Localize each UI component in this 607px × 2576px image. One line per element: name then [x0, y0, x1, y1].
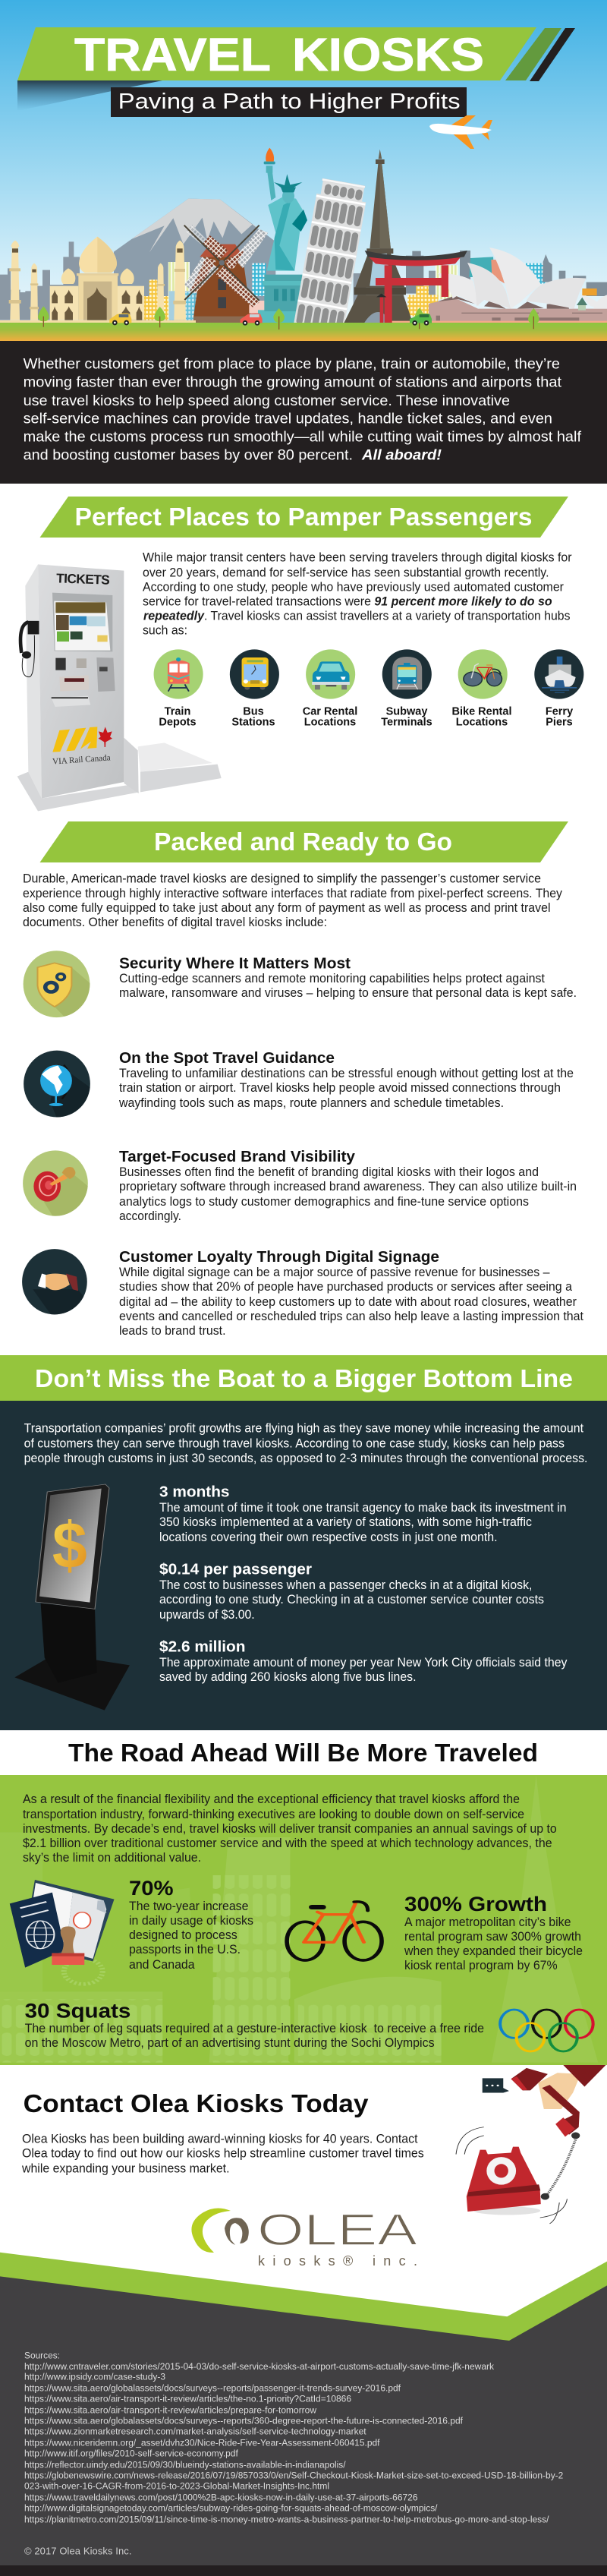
text block: sources: Sources: [24, 2351, 60, 2361]
icon labels: Bus [243, 706, 264, 718]
text block: sources: https://reflector.uindy.edu/2015/09/30/blueindy-stations-available-in-indianapolis/ [24, 2460, 346, 2470]
trees and cars [38, 305, 607, 329]
stat: $2.6 million: saved by adding 260 kiosks along five bus lines. [159, 1670, 416, 1684]
footer background [0, 2253, 607, 2576]
text block: sources: https://www.sita.aero/globalassets/docs/surveys--reports/360-degree-report-the-future-is-connected-2016.pdf [24, 2416, 464, 2426]
text block: sources: https://planitmetro.com/2015/09/11/since-time-is-money-metro-wants-a-business-partner-to-help-metrobus-go-more-and-stop-less/ [24, 2515, 549, 2525]
icon: subway [382, 649, 432, 699]
text block: sources: 023-with-over-16-CAGR-from-2016-to-2023-Global-Market-Insights-Inc.html [24, 2481, 329, 2492]
text: accordingly. [119, 1209, 181, 1223]
stat: 30 Squats: The number of leg squats required at a gesture-interactive kiosk to receive a free ride [25, 2021, 484, 2035]
icon: red telephone with hand [456, 2065, 605, 2224]
icon labels: Terminals [381, 717, 432, 729]
stat: 300% Growth: A major metropolitan city’s bike [404, 1915, 571, 1929]
stat: 70%: designed to process [129, 1928, 237, 1942]
stat: 300% Growth: 300% Growth [404, 1893, 547, 1915]
icon: shield with gears [24, 951, 93, 1020]
windmill [184, 225, 268, 323]
text: Customer Loyalty Through Digital Signage [119, 1248, 439, 1266]
intro panel [0, 341, 607, 484]
text block: perfect places [143, 550, 572, 637]
text: studies show that 20% of people have purchased products or services after seeing a [119, 1279, 573, 1294]
heading: Packed and Ready to Go: Packed and Ready to Go [154, 828, 452, 856]
text block [23, 1792, 557, 1865]
text block: packed intro: experience through highly interactive software interfaces that radiate from pixel-perfect screens. They [23, 886, 563, 900]
sub-element: handset [20, 621, 39, 677]
stat: $2.6 million: $2.6 million [159, 1638, 246, 1656]
icon: train [154, 649, 203, 699]
benefit: brand visibility [23, 1148, 577, 1223]
heading: Don’t Miss the Boat to a Bigger Bottom Line [35, 1364, 573, 1392]
icon labels: Stations [231, 717, 275, 729]
icon labels: Bike Rental [452, 706, 511, 718]
text: wayfinding tools such as maps, route planners and schedule timetables. [118, 1096, 504, 1110]
icon labels [159, 706, 573, 729]
icon labels: Ferry [546, 706, 573, 718]
stat: $0.14 per passenger: $0.14 per passenger [159, 1561, 312, 1578]
icon: dart target [23, 1150, 93, 1219]
intro panel: make the customs process run smoothly—all while cutting wait times by almost half [24, 429, 582, 446]
icon: VIA Rail ticket kiosk [17, 564, 222, 811]
text block: sources: https://www.sita.aero/air-transport-it-review/articles/the-no.1-priority?CatId=10866 [24, 2394, 351, 2404]
text block: perfect places: such as: [143, 623, 187, 637]
icon labels: Locations [456, 717, 508, 729]
intro panel: self-service machines can provide travel updates, handle ticket sales, and even [24, 410, 552, 427]
text block: perfect places: repeatedly [143, 608, 205, 623]
copyright: © 2017 Olea Kiosks Inc. [24, 2546, 132, 2557]
heading [0, 1355, 607, 1401]
stat: 30 Squats: on the Moscow Metro, part of an advertising stunt during the Sochi Olympics [25, 2035, 435, 2050]
logo: Olea Kiosks Inc: OLEA [257, 2206, 417, 2255]
text block: perfect places: . Travel kiosks can assist travellers at a variety of transportation hubs [204, 608, 571, 623]
text block: perfect places: service for travel-related transactions were [143, 594, 371, 608]
text block: As a result of the financial flexibility and the exceptional efficiency that travel kiosks afford the [23, 1792, 520, 1806]
text block: sources [24, 2351, 563, 2525]
Eiffel Tower [344, 150, 413, 323]
icon: bicycle [287, 1902, 382, 1960]
icon: car [306, 649, 355, 699]
icon: ferry [534, 649, 583, 699]
sub-element: chat bubble [483, 2078, 509, 2092]
stat: $2.6 million: The approximate amount of money per year New York City officials said they [159, 1655, 568, 1670]
icon labels: Car Rental [303, 706, 357, 718]
text block: transportation industry, forward-thinking executives are looking to double down on self-service [23, 1807, 524, 1821]
title ribbon [17, 27, 575, 111]
text block: perfect places: 91 percent more likely to do so [374, 594, 552, 608]
text block: packed intro: documents. Other benefits of digital travel kiosks include: [23, 915, 327, 929]
text: Traveling to unfamiliar destinations can be stressful enough without getting lost at the [119, 1066, 574, 1080]
title ribbon: TRAVEL [74, 29, 271, 80]
text block: sources: https://www.sita.aero/globalassets/docs/surveys--reports/passenger-it-trends-survey-2016.pdf [24, 2382, 401, 2393]
stat: 3 months: 3 months [159, 1483, 229, 1501]
text: leads to brand trust. [119, 1323, 226, 1338]
icon: Olympic rings [500, 2010, 593, 2051]
text block: perfect places: According to one study, people who have previously used automated customer [143, 579, 564, 594]
text: train station or airport. Travel kiosks help people avoid missed connections through [119, 1080, 561, 1095]
benefit: security [24, 951, 577, 1020]
hero: sky and travel landmarks [0, 0, 607, 377]
text: On the Spot Travel Guidance [119, 1049, 335, 1067]
panel: Bigger Bottom Line [0, 1355, 607, 1730]
heading: Perfect Places to Pamper Passengers: Perfect Places to Pamper Passengers [74, 503, 533, 531]
intro panel: Whether customers get from place to place by plane, train or automobile, they’re [24, 355, 560, 372]
illustration: right landmarks (Pisa, Eiffel, torii, Sydney Opera) [286, 150, 607, 377]
logo: Olea Kiosks Inc: kiosks® inc. [258, 2253, 417, 2269]
text: Cutting-edge scanners and remote monitoring capabilities helps protect against [119, 971, 545, 985]
text block: sources: https://www.niceridemn.org/_asset/dvhz30/Nice-Ride-Five-Year-Assessment-060415.pdf [24, 2438, 380, 2448]
intro panel: moving faster than ever through the growing amount of stations and airports that [24, 374, 562, 391]
text: malware, ransomware and viruses – helping to ensure that personal data is kept safe. [119, 985, 577, 1000]
stat: 70%: and Canada [129, 1957, 195, 1972]
icon: bicycle [458, 649, 508, 699]
stat: 3 months [159, 1483, 566, 1544]
stat: 3 months: The amount of time it took one transit agency to make back its investment in [159, 1500, 566, 1515]
text: Security Where It Matters Most [119, 954, 351, 972]
intro panel: and boosting customer bases by over 80 percent. [24, 447, 353, 464]
stat: 30 Squats [25, 2000, 484, 2050]
stat: 300% Growth: when they expanded their bicycle [404, 1944, 583, 1958]
icon labels: Depots [159, 717, 197, 729]
heading: Packed and Ready to Go [39, 821, 568, 862]
text block: sources: http://www.ipsidy.com/case-study-3 [24, 2372, 165, 2382]
text: events and cancelled or rescheduled trips can also help leave a lasting impression that [119, 1309, 583, 1323]
text block: sources: https://www.traveldailynews.com/post/1000%2B-apc-kiosks-now-in-daily-use-at-37-airports-66726 [24, 2492, 418, 2503]
text block: Transportation companies’ profit growths are flying high as they save money while increasing the amount [24, 1421, 583, 1436]
text block: packed intro: Durable, American-made travel kiosks are designed to simplify the passenger’s customer service [23, 871, 541, 885]
text [119, 1148, 577, 1223]
stat: 70%: The two-year increase [129, 1899, 249, 1913]
text block: sources: https://www.zionmarketresearch.com/market-analysis/self-service-technology-market [24, 2426, 366, 2437]
stat: 70% [129, 1877, 253, 1972]
text block: sources: http://www.digitalsignagetoday.com/articles/subway-rides-going-for-squats-ahead-of-moscow-olympics/ [24, 2502, 438, 2513]
heading: Perfect Places to Pamper Passengers [39, 497, 568, 538]
text block: investments. By decade’s end, travel kiosks will deliver transit companies an annual savings of up to [23, 1821, 557, 1836]
icon: handshake [22, 1249, 87, 1315]
heading: Contact Olea Kiosks Today: Contact Olea Kiosks Today [24, 2089, 369, 2117]
subtitle [111, 87, 467, 117]
icon labels: Subway [386, 706, 427, 718]
stat: 300% Growth: kiosk rental program by 67% [404, 1958, 558, 1972]
stat: $0.14 per passenger: The cost to businesses when a passenger checks in at a digital kiosk, [159, 1578, 533, 1592]
text block: contact [21, 2132, 424, 2175]
icon row: transportation hubs [154, 649, 583, 729]
heading: The Road Ahead Will Be More Traveled: The Road Ahead Will Be More Traveled [68, 1739, 538, 1767]
text block: people through customs in just 30 seconds, as opposed to 2-3 minutes through the conventional process. [24, 1451, 588, 1465]
stat: 70%: 70% [129, 1877, 174, 1900]
text: Target-Focused Brand Visibility [119, 1148, 356, 1165]
illustration: left landmarks (Taj Mahal, Fuji, windmill, Liberty) [0, 148, 311, 323]
text block: sources: https://globenewswire.com/news-release/2016/07/19/857033/0/en/Self-Checkout-Kiosk-Market-size-set-to-exceed-USD-18-billion-by-2 [24, 2470, 563, 2481]
intro panel: use travel kiosks to help speed along customer service. These innovative [24, 393, 510, 409]
stat: 3 months: locations covering their own respective costs in just one month. [159, 1530, 498, 1544]
icon: digital kiosk with dollar sign [14, 1484, 130, 1711]
text: digital ad – the ability to keep customers up to date with about road closures, weather [119, 1294, 577, 1309]
text block: sky’s the limit on additional value. [23, 1850, 201, 1865]
icon: passport and stamp [10, 1880, 115, 1968]
stat: 300% Growth [404, 1893, 583, 1972]
sub-element: VIA logo [52, 727, 112, 767]
stat: 3 months: 350 kiosks implemented at a variety of stations, with some high-traffic [159, 1515, 532, 1529]
logo: Olea Kiosks Inc [191, 2206, 417, 2269]
text block: packed intro [23, 871, 563, 929]
text block: perfect places: over 20 years, demand for self-service has seen substantial growth recently. [143, 565, 549, 579]
icon labels: Train [165, 706, 190, 718]
title ribbon: KIOSKS [292, 29, 484, 80]
ground [0, 320, 607, 341]
benefit: loyalty [22, 1248, 583, 1338]
text: While digital signage can be a major source of passive revenue for businesses – [119, 1265, 550, 1279]
Leaning Tower of Pisa [286, 178, 369, 377]
icon: globe [24, 1051, 93, 1121]
text block: sources: http://www.cntraveler.com/stories/2015-04-03/do-self-service-kiosks-at-airport-customs-actually-save-time-jfk-newark [24, 2361, 495, 2372]
subtitle: Paving a Path to Higher Profits [118, 90, 461, 114]
intro panel: All aboard! [361, 447, 442, 464]
text: proprietary software through increased brand awareness. They can also utilize built-in [119, 1179, 577, 1193]
stat: $0.14 per passenger [159, 1561, 544, 1622]
text block: $2.1 billion over traditional customer service and with the speed at which technology advances, the [23, 1836, 552, 1850]
stat: 300% Growth: rental program saw 300% growth [404, 1929, 581, 1944]
panel: The Road Ahead [0, 1775, 607, 2065]
text block: sources: http://www.itif.org/files/2010-self-service-economy.pdf [24, 2448, 238, 2459]
text block: of customers they can serve through travel kiosks. According to one case study, kiosks can help pass [24, 1436, 565, 1451]
benefit: guidance [24, 1049, 574, 1121]
text [119, 1248, 583, 1338]
stat: 70%: passports in the U.S. [129, 1942, 241, 1956]
Taj Mahal [9, 237, 186, 320]
icon: airplane [429, 115, 492, 149]
text [118, 1049, 574, 1110]
text: analytics logs to study customer demographics and fine-tune service options [119, 1194, 529, 1209]
text block [24, 1421, 588, 1465]
stat: 70%: in daily usage of kiosks [129, 1913, 253, 1928]
icon: bus [230, 649, 279, 699]
Statue of Liberty [258, 148, 311, 323]
torii gate [365, 251, 467, 323]
icon: digital kiosk with dollar sign: $ [52, 1509, 87, 1582]
watermark: landmarks [0, 1775, 598, 2063]
stat: $0.14 per passenger: upwards of $3.00. [159, 1607, 255, 1622]
text block: packed intro: also come fully equipped to take just about any form of payment as well as process and print travel [23, 900, 551, 915]
text block: contact: Olea today to find out how our kiosks help streamline customer travel times [22, 2146, 424, 2161]
text block: sources: https://www.sita.aero/air-transport-it-review/articles/prepare-for-tomorrow [24, 2404, 316, 2415]
icon: VIA Rail ticket kiosk: TICKETS [56, 570, 110, 588]
Sydney Opera House [388, 248, 607, 323]
icon labels: Locations [304, 717, 356, 729]
stat: $0.14 per passenger: according to one study. Checking in at a customer service counter costs [159, 1592, 544, 1606]
sub-element: VIA logo: VIA Rail Canada [52, 753, 111, 767]
text [119, 954, 577, 1000]
text block: perfect places: While major transit centers have been serving travelers through digital kiosks for [143, 550, 572, 564]
stat: $2.6 million [159, 1638, 568, 1684]
text block: contact: while expanding your business market. [21, 2161, 230, 2175]
text block: contact: Olea Kiosks has been building award-winning kiosks for 40 years. Contact [22, 2132, 418, 2146]
icon labels: Piers [546, 717, 573, 729]
text: Businesses often find the benefit of branding digital kiosks with their logos and [119, 1165, 539, 1179]
stat: 30 Squats: 30 Squats [25, 2000, 131, 2023]
